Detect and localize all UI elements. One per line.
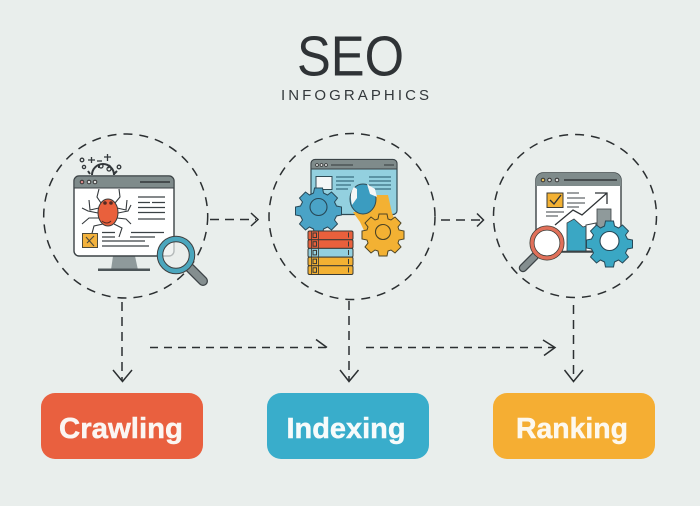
book stack bbox=[308, 231, 353, 274]
small gear and sparkles bbox=[80, 154, 121, 175]
page text lines bbox=[102, 197, 165, 246]
title: SEO bbox=[297, 24, 404, 88]
arrow: lower indexing to ranking bbox=[366, 340, 555, 356]
orange gear bbox=[362, 214, 404, 256]
spider legs bbox=[82, 189, 131, 237]
report window bbox=[536, 173, 621, 252]
label: crawling: Crawling bbox=[59, 413, 183, 445]
subtitle: INFOGRAPHICS bbox=[281, 87, 429, 104]
globe bbox=[350, 184, 376, 214]
spider body bbox=[98, 199, 118, 226]
magnifier bbox=[190, 268, 203, 281]
monitor window bbox=[74, 176, 174, 256]
trend arrow bbox=[555, 193, 607, 225]
text lines bbox=[546, 193, 585, 216]
label: indexing bbox=[267, 393, 429, 459]
icon: indexing window, gears and books bbox=[296, 160, 404, 274]
checkbox bbox=[547, 193, 563, 208]
monitor stand bbox=[111, 256, 138, 270]
magnifier bbox=[532, 228, 562, 258]
circle: ranking bbox=[494, 134, 656, 298]
blue gear bbox=[296, 188, 342, 234]
label: ranking bbox=[493, 393, 655, 459]
arrow: down to crawling bbox=[113, 302, 132, 382]
icon: crawling spider on monitor bbox=[74, 154, 203, 281]
gear bbox=[586, 221, 632, 267]
window bbox=[311, 160, 397, 214]
handle bbox=[523, 256, 535, 268]
arrow: down to ranking bbox=[564, 305, 583, 382]
icon: ranking report with chart bbox=[523, 173, 632, 268]
arrow: down to indexing bbox=[340, 301, 358, 382]
orange image box bbox=[82, 234, 98, 248]
arrow: indexing to ranking bbox=[441, 214, 484, 226]
arrow: lower crawling to indexing bbox=[150, 340, 327, 348]
arrow: crawling to indexing bbox=[210, 213, 258, 226]
circle: indexing bbox=[269, 134, 435, 300]
yellow blob bbox=[347, 195, 398, 242]
label: crawling bbox=[41, 393, 203, 459]
bars bbox=[567, 219, 586, 251]
label: ranking: Ranking bbox=[516, 413, 628, 445]
circle: crawling bbox=[44, 134, 208, 298]
label: indexing: Indexing bbox=[286, 413, 406, 445]
